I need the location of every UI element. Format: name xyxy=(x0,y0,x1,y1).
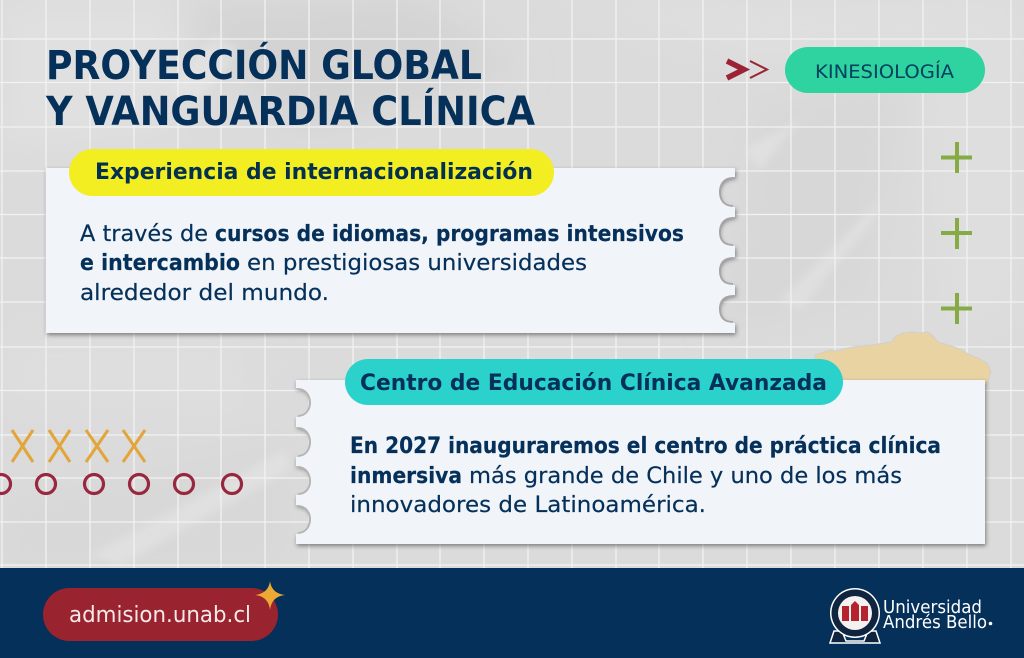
panel: experiencia de internacionalización xyxy=(46,149,735,333)
body text: cursos de idiomas, programas intensivos xyxy=(215,221,684,247)
title: Y VANGUARDIA CLÍNICA xyxy=(45,87,535,135)
logo: Universidad Andrés Bello xyxy=(830,588,992,643)
torn tan paper xyxy=(815,332,991,385)
website pill: admision.unab.cl xyxy=(69,603,251,628)
card body with notched right edge xyxy=(46,168,735,333)
notch shading xyxy=(720,178,733,322)
category pill: Kinesiología xyxy=(785,47,985,93)
title xyxy=(45,41,535,135)
heading pill: Experiencia de internacionalización xyxy=(95,159,533,185)
category pill: Kinesiología: KINESIOLOGÍA xyxy=(815,61,954,83)
body text: e intercambio xyxy=(80,250,240,276)
logo wordmark: Andrés Bello xyxy=(883,613,987,633)
icons: row of orange crosses xyxy=(12,430,145,462)
icons: green plus signs xyxy=(941,142,972,324)
body text: alrededor del mundo. xyxy=(80,280,329,306)
body text: más grande de Chile y uno de los más xyxy=(469,463,902,489)
icon: gold sparkle xyxy=(255,581,285,610)
icons: row of red circles xyxy=(0,474,242,494)
logo emblem xyxy=(830,588,880,643)
body text xyxy=(80,221,684,306)
body text: innovadores de Latinoamérica. xyxy=(350,492,706,518)
website pill xyxy=(43,588,278,641)
heading pill xyxy=(69,149,554,196)
panel: centro de educación clínica avanzada xyxy=(296,359,985,544)
title: PROYECCIÓN GLOBAL xyxy=(46,41,482,89)
logo wordmark xyxy=(883,598,992,633)
heading pill: Centro de Educación Clínica Avanzada xyxy=(360,370,827,396)
logo wordmark: Universidad xyxy=(883,598,982,618)
body text: en prestigiosas universidades xyxy=(247,250,587,276)
body text: A través de xyxy=(80,221,208,247)
body text: En 2027 inauguraremos el centro de práctica clínica xyxy=(350,433,941,459)
icon: double chevron arrows xyxy=(727,61,767,78)
body text xyxy=(350,433,941,518)
body text: inmersiva xyxy=(350,463,462,489)
footer band xyxy=(0,568,1024,658)
card body with notched left edge xyxy=(296,380,985,544)
notch shading xyxy=(298,389,310,533)
heading pill xyxy=(345,359,843,405)
